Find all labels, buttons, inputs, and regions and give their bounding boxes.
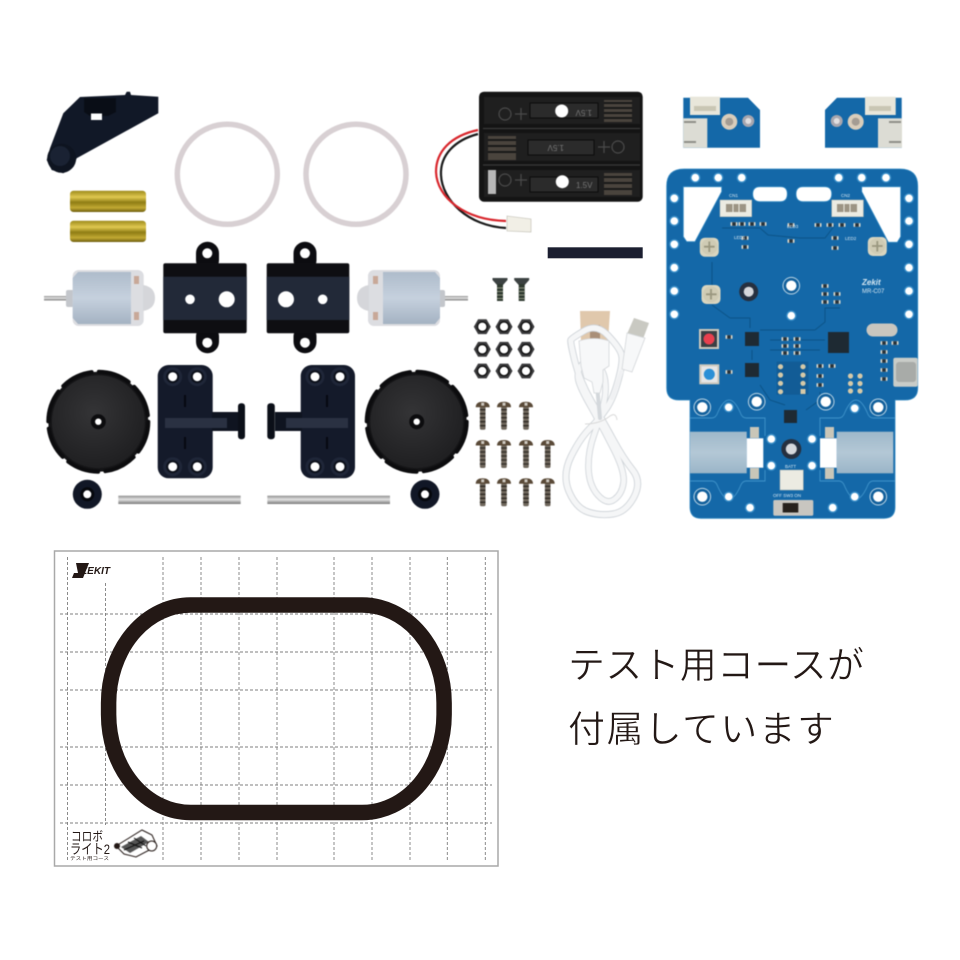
part: left motor mount: [163, 242, 247, 353]
part: line sensor board left: [683, 97, 760, 148]
battery box: 1.5V: [575, 108, 592, 117]
sheet paper: [54, 551, 498, 866]
dashed grid: [60, 557, 492, 861]
part: rubber ring right: [306, 124, 406, 224]
silkscreen labels: [729, 193, 885, 498]
USB-A plug body: [579, 338, 609, 393]
circuit traces: [712, 225, 840, 410]
USB-C metal end: [627, 318, 649, 339]
part: brass spacers: [70, 191, 146, 242]
battery box: [479, 92, 643, 202]
part: black sensor arm: [47, 92, 158, 173]
silkscreen contours around the drive area: [690, 400, 895, 499]
part: right motor: [357, 270, 468, 326]
part: battery holder with lead: [436, 92, 643, 232]
crystal oscillator: [866, 324, 898, 336]
part: rubber ring left: [177, 124, 277, 224]
part: right motor mount: [267, 242, 349, 353]
silkscreen labels: LED1: [734, 235, 746, 240]
silkscreen labels: OFF SW3 ON: [773, 493, 801, 498]
caption text: [568, 645, 864, 750]
silkscreen labels: BATT: [785, 464, 796, 469]
part: line sensor board right: [825, 97, 902, 148]
part: pan-head screws: [476, 402, 555, 506]
right drive motor pads: [820, 427, 893, 479]
ZEKIT logo: ZEKIT: [80, 566, 111, 577]
USB-C plug body: [622, 333, 645, 372]
ZEKIT logo: [72, 563, 111, 578]
oval test track: [109, 605, 444, 812]
product name: ライト2: [70, 841, 110, 857]
red push button: [699, 329, 719, 349]
caption line 2: 付属しています: [568, 709, 834, 750]
part: white USB cable: [566, 311, 649, 515]
part: left wheel: [48, 372, 148, 472]
mounting holes: [669, 172, 914, 513]
left drive motor pads: [690, 427, 763, 479]
silkscreen labels: CN1: [729, 193, 738, 198]
surface-mount components: [726, 222, 898, 387]
pin headers: [777, 362, 863, 395]
caption line 1: テスト用コースが: [568, 645, 864, 686]
USB-A metal end: [580, 311, 610, 342]
blue push button: [699, 364, 719, 384]
part: left motor: [44, 270, 155, 326]
battery box: 1.5V: [576, 181, 593, 190]
power slide switch: [773, 500, 813, 516]
battery box: 1.5V: [547, 143, 564, 152]
part: left gearbox plate: [158, 365, 245, 478]
trimmer potentiometers: [700, 237, 887, 304]
electrolytic capacitors: [739, 282, 801, 459]
cable tie: [585, 415, 617, 424]
part: hex nuts: [474, 319, 534, 378]
part: main robot circuit board: [667, 169, 918, 518]
integrated circuits: [745, 332, 849, 423]
silkscreen labels: Zekit: [861, 278, 881, 287]
part: steel axles: [118, 496, 390, 504]
part: small pulleys: [73, 480, 440, 509]
JST connector: [507, 216, 531, 232]
parts photo: chassis and drive parts: [44, 92, 468, 509]
USB-C socket: [893, 358, 918, 387]
robot car line drawing: [114, 830, 157, 857]
silkscreen labels: LED3: [787, 224, 799, 229]
silkscreen labels: MR-C07: [862, 289, 885, 295]
sensor connectors: [720, 200, 863, 490]
part: right gearbox plate: [267, 365, 355, 478]
product name: コロボ: [71, 829, 103, 844]
part: right wheel: [367, 372, 467, 472]
part: heat-shrink tube: [548, 247, 643, 258]
red and black wires: [436, 130, 506, 228]
product name: [70, 829, 110, 862]
cable loops: [566, 328, 638, 515]
silkscreen labels: CN2: [841, 193, 850, 198]
silkscreen labels: LED2: [845, 236, 857, 241]
product name: テスト用コース: [70, 856, 110, 862]
board outline with cut-outs: [667, 169, 918, 518]
part: short flat-head screws: [492, 278, 529, 301]
test course sheet: [54, 551, 498, 866]
